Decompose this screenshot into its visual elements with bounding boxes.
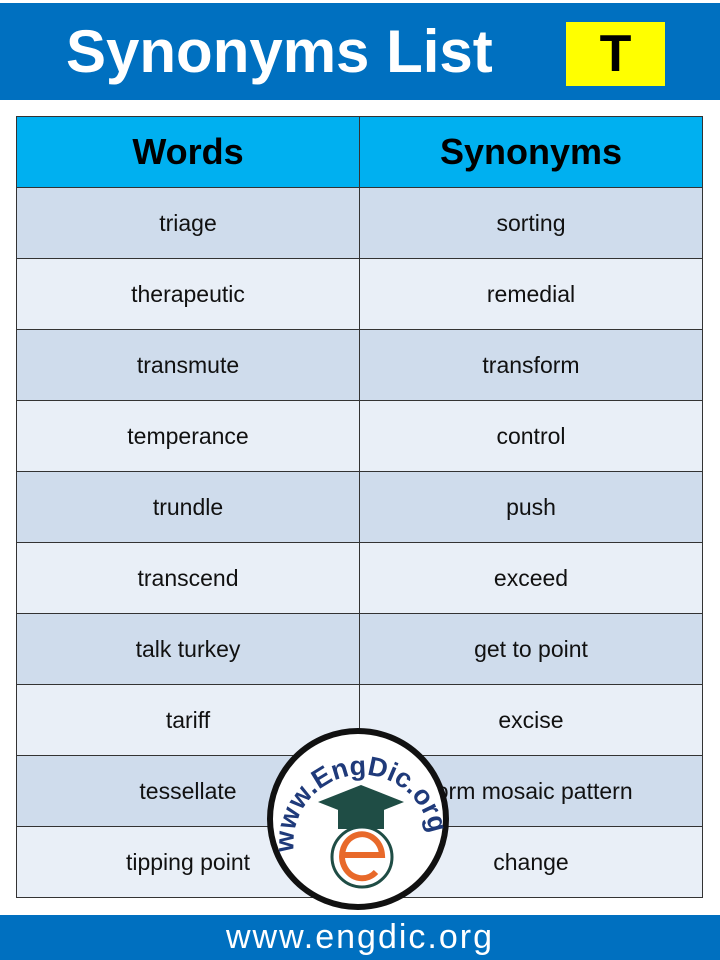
- header banner: [0, 3, 720, 100]
- table: exceed: [494, 564, 568, 590]
- letter box: T: [600, 25, 631, 83]
- table: push: [506, 494, 556, 520]
- table: remedial: [487, 280, 575, 306]
- table: tessellate: [139, 778, 237, 804]
- table: change: [493, 848, 569, 874]
- letter box: [566, 22, 665, 86]
- table: therapeutic: [131, 280, 245, 306]
- table: get to point: [474, 636, 588, 662]
- table: control: [496, 422, 566, 448]
- table: form mosaic pattern: [429, 778, 633, 804]
- table: [16, 116, 703, 898]
- table: Synonyms: [440, 131, 622, 172]
- table: temperance: [127, 422, 249, 448]
- logo: www.EngDic.org: [279, 756, 444, 852]
- table: tipping point: [126, 848, 250, 874]
- title: Synonyms List: [66, 18, 493, 85]
- table: sorting: [496, 210, 566, 236]
- table: trundle: [153, 494, 223, 520]
- table: transmute: [137, 352, 239, 378]
- logo: [267, 728, 449, 910]
- table: talk turkey: [136, 636, 240, 662]
- table: tariff: [166, 706, 210, 732]
- table: Words: [132, 131, 244, 172]
- table: excise: [498, 706, 564, 732]
- table: transcend: [137, 564, 238, 590]
- footer: www.engdic.org: [226, 918, 494, 956]
- table: transform: [482, 352, 580, 378]
- footer: [0, 915, 720, 960]
- table: triage: [159, 210, 217, 236]
